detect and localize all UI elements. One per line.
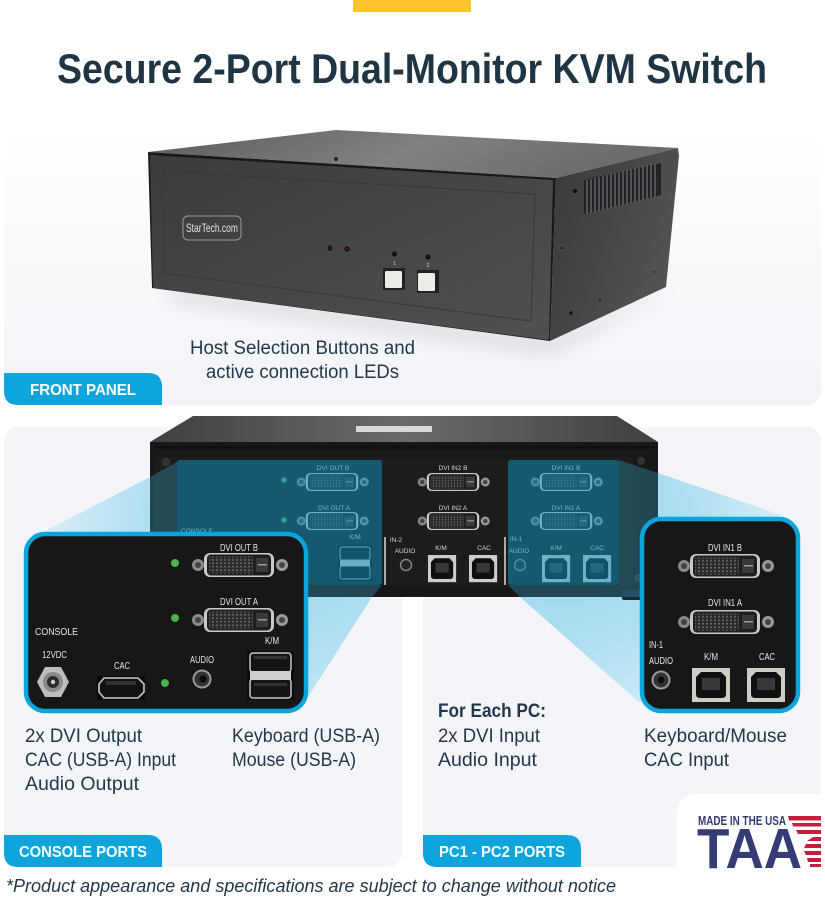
rear PC2 ports bbox=[390, 465, 497, 582]
rear PC1 ports: AUDIO bbox=[509, 548, 529, 555]
icon: USB-B K/M bbox=[692, 668, 730, 702]
text: console USB: Mouse (USB-A) bbox=[232, 750, 356, 771]
callout: console ports: CONSOLE bbox=[35, 627, 78, 638]
ray tint over rear device: PC bbox=[508, 460, 658, 597]
logo bbox=[183, 216, 241, 240]
text: console USB: Keyboard (USB-A) bbox=[232, 726, 380, 747]
badge: TAA made in the USA: MADE IN THE USA bbox=[698, 814, 786, 828]
badge: TAA made in the USA bbox=[677, 794, 825, 881]
rear PC1 ports: IN-1 bbox=[510, 536, 523, 543]
caption: front panel bbox=[190, 338, 415, 383]
rear PC1 ports: K/M bbox=[550, 545, 562, 552]
callout: console ports bbox=[26, 534, 306, 711]
rear console ports: CONSOLE bbox=[181, 528, 213, 535]
text: PC USB bbox=[644, 726, 787, 771]
icon: USB-A CAC bbox=[97, 676, 145, 700]
device: KVM front view bbox=[148, 130, 679, 341]
rear PC1 ports: DVI IN1 B bbox=[552, 465, 580, 472]
active connection LEDs bbox=[327, 245, 431, 269]
callout: PC ports: CAC bbox=[759, 652, 775, 663]
text: for each PC: Audio Input bbox=[438, 750, 538, 771]
text: PC USB: Keyboard/Mouse bbox=[644, 726, 787, 747]
icon: audio jack bbox=[652, 672, 670, 688]
rear console ports: K/M bbox=[349, 534, 361, 541]
callout: console ports: DVI OUT A bbox=[220, 597, 258, 608]
text: console outputs bbox=[25, 726, 177, 795]
icon: LED bbox=[161, 679, 169, 687]
icon: audio jack bbox=[194, 670, 210, 688]
callout: console ports: AUDIO bbox=[190, 655, 214, 666]
callout: PC ports: DVI IN1 B bbox=[708, 543, 742, 554]
icon: DVI out A bbox=[192, 608, 288, 632]
rear PC1 ports bbox=[509, 465, 611, 582]
rear PC2 ports: DVI IN2 A bbox=[439, 505, 468, 512]
tab: front panel: FRONT PANEL bbox=[30, 382, 136, 399]
icon: LED bbox=[171, 559, 179, 567]
text: for each PC bbox=[438, 701, 546, 771]
callout: console ports: CAC bbox=[114, 661, 130, 672]
tab: PC1 - PC2 ports: PC1 - PC2 PORTS bbox=[439, 844, 565, 861]
device shadow bbox=[165, 288, 665, 352]
caption: front panel: active connection LEDs bbox=[206, 362, 399, 383]
callout: PC ports: DVI IN1 A bbox=[708, 598, 742, 609]
panel: console ports bbox=[4, 427, 402, 867]
highlight: PC1 ports bbox=[508, 460, 619, 585]
ray tint over rear device: console bbox=[150, 462, 382, 597]
rear dividers bbox=[385, 537, 505, 585]
text: console outputs: Audio Output bbox=[25, 774, 140, 795]
callout: PC ports: K/M bbox=[704, 652, 718, 663]
icon: DVI in A bbox=[678, 610, 774, 634]
icon: double USB-A bbox=[247, 651, 294, 700]
text: console USB bbox=[232, 726, 380, 771]
host selection buttons bbox=[383, 268, 439, 293]
tab: console ports: CONSOLE PORTS bbox=[19, 844, 147, 861]
text: console outputs: CAC (USB-A) Input bbox=[25, 750, 177, 771]
icon: USB-B CAC bbox=[747, 668, 785, 702]
text: PC USB: CAC Input bbox=[644, 750, 730, 771]
zoom rays: PC bbox=[520, 473, 790, 703]
zoom rays: console bbox=[43, 477, 372, 697]
callout: PC ports: AUDIO bbox=[649, 656, 673, 667]
device: KVM rear view bbox=[150, 416, 658, 600]
icon: LED bbox=[171, 614, 179, 622]
text: for each PC: 2x DVI Input bbox=[438, 726, 541, 747]
badge: TAA made in the USA: TAA bbox=[697, 817, 802, 881]
panel: PC ports bbox=[423, 427, 821, 867]
logo: StarTech.com bbox=[186, 223, 238, 235]
rear PC2 ports: IN-2 bbox=[390, 537, 403, 544]
rear PC2 ports: CAC bbox=[477, 545, 491, 552]
side vents bbox=[584, 163, 661, 214]
tab: PC1 - PC2 ports bbox=[423, 835, 581, 867]
active connection LEDs: 1 bbox=[393, 261, 396, 267]
panel: front panel bbox=[4, 130, 821, 405]
rear console ports: DVI OUT A bbox=[318, 505, 351, 512]
text: console outputs: 2x DVI Output bbox=[25, 726, 143, 747]
rear PC2 ports: DVI IN2 B bbox=[439, 465, 467, 472]
icon: DVI in B bbox=[678, 554, 774, 578]
icon: power jack bbox=[37, 667, 69, 697]
rear PC1 ports: CAC bbox=[590, 545, 604, 552]
callout: PC ports: IN-1 bbox=[649, 640, 663, 651]
active connection LEDs: 2 bbox=[427, 263, 430, 269]
tab: console ports bbox=[4, 835, 162, 867]
rear console ports bbox=[181, 465, 372, 581]
tab: front panel bbox=[4, 373, 162, 405]
text: for each PC: For Each PC: bbox=[438, 701, 546, 722]
rear PC2 ports: AUDIO bbox=[395, 548, 415, 555]
highlight: console ports bbox=[177, 460, 382, 585]
callout: console ports: DVI OUT B bbox=[220, 543, 258, 554]
rear console ports: DVI OUT B bbox=[317, 465, 349, 472]
footnote: *Product appearance and specifications are subject to change without notice bbox=[6, 875, 616, 896]
callout: console ports: K/M bbox=[265, 636, 279, 647]
callout: console ports: 12VDC bbox=[42, 650, 67, 661]
caption: front panel: Host Selection Buttons and bbox=[190, 338, 415, 359]
rear PC1 ports: DVI IN1 A bbox=[552, 505, 581, 512]
icon: flag stripes bbox=[788, 816, 821, 867]
yellow accent bar bbox=[353, 0, 471, 12]
icon: DVI out B bbox=[192, 553, 288, 577]
callout: PC ports bbox=[642, 519, 798, 711]
rear PC2 ports: K/M bbox=[435, 545, 447, 552]
